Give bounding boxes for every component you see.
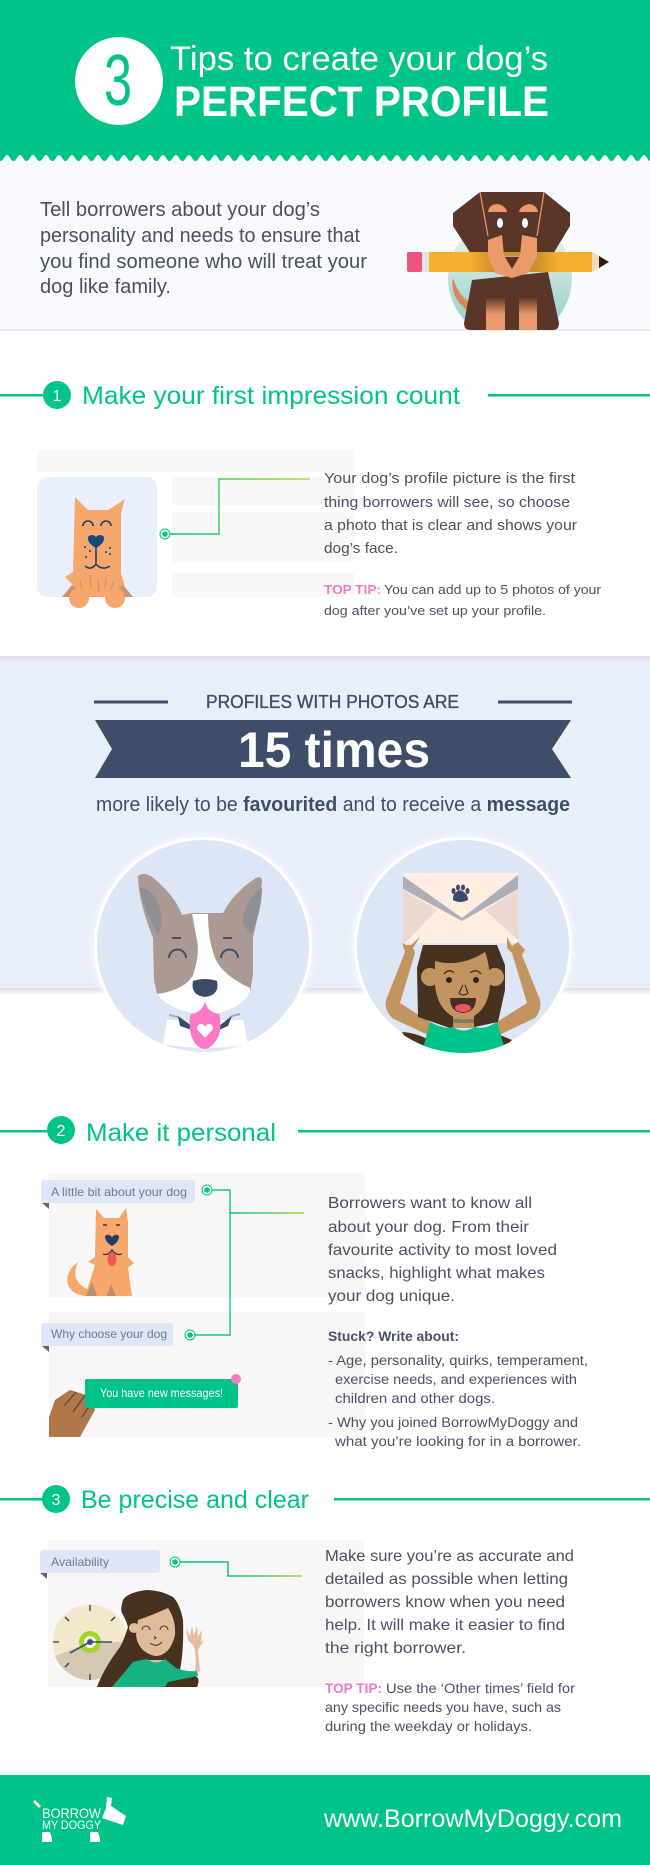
text block: profile picture: dog’s face. — [324, 540, 398, 557]
icon: dog with pencil — [407, 192, 609, 340]
text block: profile picture: You can add up to 5 photos of your — [384, 582, 602, 597]
panel: personal mock-up — [41, 1173, 366, 1437]
panel: profile picture mock-up — [37, 450, 354, 608]
text block: profile picture: Your dog’s profile picture is the first — [324, 470, 576, 487]
text block: make it personal: Borrowers want to know all — [328, 1195, 532, 1212]
logo: MY DOGGY — [42, 1818, 101, 1832]
number badge: 3 — [104, 41, 132, 121]
panel: availability mock-up — [40, 1540, 364, 1687]
text block: profile picture: thing borrowers will see, so choose — [324, 494, 570, 511]
text block: profile picture: TOP TIP: — [324, 582, 381, 597]
button: new messages: You have new messages! — [100, 1386, 223, 1400]
connector — [160, 479, 310, 539]
tag: why choose your dog: Why choose your dog — [51, 1327, 167, 1341]
text block: be precise: Use the ‘Other times’ field for — [386, 1681, 576, 1696]
text block: be precise: the right borrower. — [325, 1640, 466, 1657]
text block: make it personal: - Age, personality, quirks, temperament, — [328, 1353, 588, 1368]
icon: waving woman — [97, 1590, 204, 1687]
header band — [0, 0, 650, 161]
panel: intro — [0, 192, 650, 331]
title: Tips to create your dog’s — [170, 40, 548, 78]
tag: availability: Availability — [51, 1555, 109, 1569]
icon: clock — [52, 1604, 128, 1680]
text block: be precise: borrowers know when you need — [325, 1594, 565, 1611]
section heading 1: 1 — [53, 388, 62, 405]
text block: make it personal: favourite activity to most loved — [328, 1242, 557, 1259]
connector — [170, 1557, 302, 1576]
ribbon: 15 times: 15 times — [238, 722, 430, 778]
logo: BORROW — [42, 1805, 102, 1821]
section heading 2: 2 — [57, 1123, 66, 1140]
icon: hand — [49, 1390, 95, 1437]
text block: make it personal: what you’re looking for in a borrower. — [334, 1434, 581, 1449]
logo — [33, 1797, 126, 1842]
panel: statistic — [0, 656, 650, 995]
text block: profile picture: dog after you’ve set up your profile. — [324, 603, 546, 618]
connector — [185, 1185, 304, 1340]
intro text: Tell borrowers about your dog’s — [40, 199, 320, 221]
text block: profile picture — [324, 470, 602, 618]
intro text: you find someone who will treat your — [40, 251, 367, 273]
icon: orange dog — [62, 497, 133, 608]
intro text: dog like family. — [40, 276, 171, 298]
ribbon: 15 times — [95, 720, 571, 778]
button: new messages — [85, 1374, 241, 1408]
footer — [0, 1775, 650, 1865]
section heading 1 — [0, 381, 650, 410]
text block: be precise: during the weekday or holidays. — [325, 1719, 532, 1734]
website url: www.BorrowMyDoggy.com — [323, 1805, 622, 1833]
text block: be precise: any specific needs you have, such as — [325, 1700, 561, 1715]
title — [170, 40, 549, 126]
text block: make it personal: about your dog. From their — [328, 1219, 530, 1236]
icon: sitting dog — [67, 1208, 134, 1296]
stat heading — [94, 692, 572, 712]
text block: make it personal: children and other dogs. — [335, 1391, 495, 1406]
intro text — [40, 199, 367, 298]
text block: be precise: Make sure you’re as accurate and — [325, 1548, 574, 1565]
text block: make it personal: exercise needs, and experiences with — [335, 1372, 577, 1387]
text block: make it personal: snacks, highlight what makes — [328, 1265, 545, 1282]
tag: why choose your dog — [41, 1323, 173, 1352]
icon: happy dog in circle — [90, 835, 320, 1060]
text block: be precise: TOP TIP: — [325, 1681, 382, 1696]
title: PERFECT PROFILE — [174, 78, 549, 126]
text block: be precise: help. It will make it easier to find — [325, 1617, 565, 1634]
text block: make it personal: - Why you joined BorrowMyDoggy and — [328, 1415, 578, 1430]
section heading 2: Make it personal — [86, 1119, 276, 1147]
intro text: personality and needs to ensure that — [40, 225, 360, 247]
section heading 3 — [0, 1485, 650, 1514]
icon: woman holding envelope in circle — [352, 835, 574, 1060]
section heading 3: Be precise and clear — [81, 1486, 309, 1514]
section heading 1: Make your first impression count — [82, 382, 460, 410]
stat heading: PROFILES WITH PHOTOS ARE — [206, 692, 459, 712]
tag: a little bit about your dog: A little bit about your dog — [51, 1185, 187, 1199]
section heading 2 — [0, 1116, 650, 1147]
text block: make it personal: Stuck? Write about: — [328, 1328, 459, 1344]
text block: make it personal: your dog unique. — [328, 1288, 455, 1305]
text block: be precise — [325, 1548, 576, 1734]
tag: a little bit about your dog — [41, 1180, 195, 1209]
tag: availability — [40, 1550, 160, 1579]
number badge — [75, 37, 163, 125]
icon: paw — [452, 884, 470, 902]
text block: be precise: detailed as possible when letting — [325, 1571, 568, 1588]
stat caption: more likely to be favourited and to receive a message — [96, 794, 570, 816]
text block: make it personal — [328, 1195, 588, 1449]
section heading 3: 3 — [52, 1492, 61, 1509]
text block: profile picture: a photo that is clear and shows your — [324, 517, 577, 534]
